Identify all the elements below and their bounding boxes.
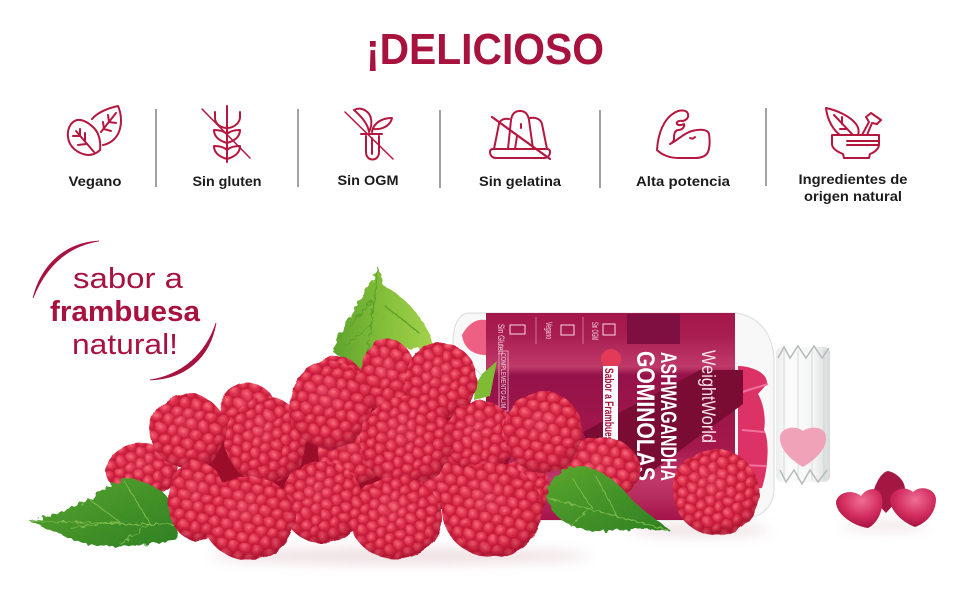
bottle glass body bbox=[453, 313, 774, 520]
separators bbox=[156, 108, 766, 188]
label bbox=[486, 313, 735, 520]
label dark block bbox=[627, 314, 680, 344]
label: flavour tag: Sabor a Frambuesa bbox=[602, 368, 616, 446]
label: product name: ASHWAGANDHA bbox=[656, 352, 681, 481]
label: Alta potencia: Alta potencia bbox=[636, 173, 730, 189]
label small icons row: Sin OGM bbox=[590, 322, 600, 340]
label dark diagonal band bbox=[583, 370, 743, 480]
benefit row bbox=[68, 106, 908, 204]
label: Vegano: Vegano bbox=[68, 173, 122, 189]
shadow mass between berries bbox=[190, 400, 510, 520]
leaf: small behind bottle bbox=[474, 361, 497, 400]
loose gummies bbox=[836, 471, 936, 528]
raspberry: front layer bbox=[168, 449, 759, 560]
label: flavour tag bbox=[601, 349, 621, 446]
ground shadow bbox=[210, 522, 929, 564]
icon: no gelatin bbox=[490, 111, 550, 159]
leaf: right bbox=[546, 466, 671, 531]
icon: no GMO plant bbox=[345, 109, 393, 160]
label small icons row: Sin Gluten bbox=[496, 324, 506, 354]
label: Ingredientes de origen natural: origen natural bbox=[804, 188, 902, 204]
label: supplement box: COMPLEMENTO ALIM bbox=[499, 353, 506, 408]
callout: natural raspberry flavour: natural! bbox=[72, 329, 178, 361]
leaf: top bbox=[333, 266, 433, 376]
raspberry pile back bbox=[106, 356, 640, 520]
label small icons row bbox=[496, 317, 615, 354]
icon: herbal mortar bbox=[826, 108, 881, 158]
label: Ingredientes de origen natural bbox=[798, 171, 908, 204]
callout: natural raspberry flavour: frambuesa bbox=[50, 296, 201, 328]
gummies inside bbox=[738, 366, 768, 490]
icon: strength arm bbox=[657, 110, 710, 158]
gummy: back bbox=[872, 471, 905, 513]
label: brand: WeightWorld bbox=[697, 350, 718, 443]
raspberry: middle layer bbox=[150, 339, 582, 486]
leaf: left bbox=[29, 478, 178, 547]
label: Sin gelatina: Sin gelatina bbox=[479, 173, 561, 189]
gummy in base of bottle bbox=[462, 320, 486, 355]
title: ¡DELICIOSO bbox=[366, 25, 604, 74]
label: product name: GOMINOLAS bbox=[631, 351, 659, 481]
label: product name bbox=[631, 351, 681, 481]
label: supplement box bbox=[499, 351, 508, 411]
label: Ingredientes de origen natural: Ingredientes de bbox=[798, 171, 908, 187]
bottle neck bbox=[776, 346, 830, 484]
label: Sin OGM: Sin OGM bbox=[338, 172, 398, 188]
label: Sin gluten: Sin gluten bbox=[192, 173, 262, 189]
gummy: right bbox=[890, 488, 936, 527]
raspberry pile front bbox=[150, 339, 759, 560]
gummy: left bbox=[836, 489, 882, 528]
gummy in neck bbox=[780, 428, 826, 467]
icon: no gluten wheat bbox=[202, 106, 250, 162]
icon: vegan leaves bbox=[68, 106, 121, 155]
callout: natural raspberry flavour: sabor a bbox=[73, 263, 184, 295]
product bottle bbox=[453, 313, 830, 520]
label small icons row: Vegano bbox=[544, 322, 554, 339]
callout: natural raspberry flavour bbox=[33, 241, 216, 380]
raspberry: back layer bbox=[106, 356, 640, 516]
